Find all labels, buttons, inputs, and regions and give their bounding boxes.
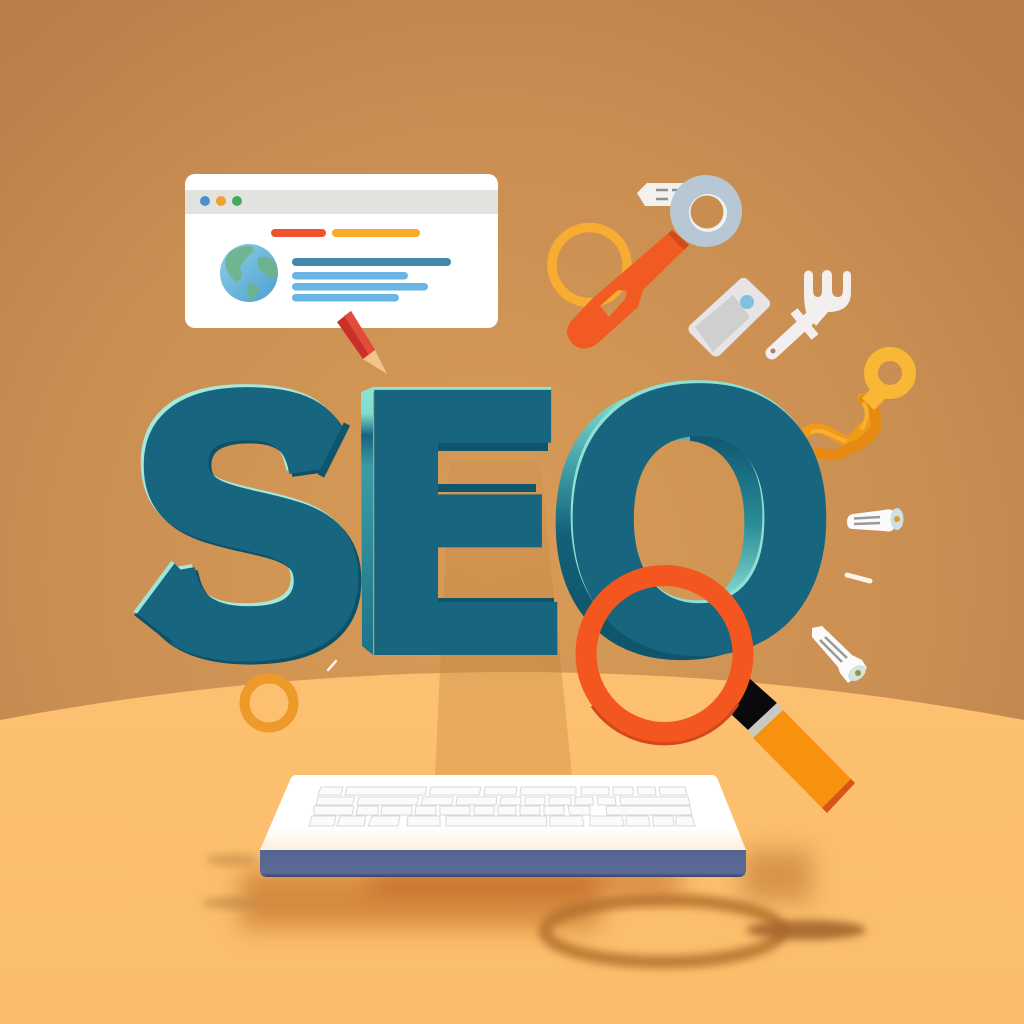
- small dash: [328, 661, 336, 670]
- floor shadows: [202, 850, 866, 962]
- letter O: O: [562, 310, 834, 723]
- letter O: O: [546, 317, 819, 730]
- globe icon: [220, 244, 278, 302]
- icon: card: [688, 278, 770, 357]
- letter O: [556, 380, 826, 660]
- title bar: [185, 190, 498, 214]
- icon: SEO 3D letters: [134, 380, 826, 665]
- icon: wrench: [552, 175, 742, 348]
- browser window: [185, 174, 498, 328]
- letter S: S: [130, 320, 364, 727]
- window panel: [185, 174, 498, 328]
- window dots: [200, 196, 242, 206]
- heading bars: [271, 229, 420, 237]
- text lines: [292, 258, 451, 302]
- lens ring: [586, 576, 743, 732]
- keyboard top: [260, 775, 746, 850]
- icon: plug top: [847, 508, 904, 532]
- icon: pencil: [337, 311, 387, 374]
- light beam behind keyboard: [435, 460, 572, 775]
- wrench handle: [567, 230, 689, 348]
- icon: magnifying glass: [586, 576, 855, 813]
- icon: keyboard: [260, 775, 746, 877]
- letter O: O: [544, 317, 816, 730]
- icon: small orange ring: [244, 678, 294, 728]
- letter E: E: [359, 316, 564, 727]
- yellow ring: [552, 228, 627, 302]
- floor: [0, 672, 1024, 1024]
- letter S: S: [127, 317, 361, 724]
- icon: fork tool: [770, 270, 851, 354]
- wrench head: [670, 175, 742, 247]
- handle: [732, 678, 777, 730]
- icon: chain with ring: [806, 354, 909, 455]
- keys: [309, 787, 695, 826]
- icon: plug bottom: [812, 626, 869, 684]
- letter O: O: [564, 313, 836, 726]
- dash: [847, 575, 870, 581]
- tag behind wrench: [637, 183, 684, 206]
- letter S: S: [133, 323, 367, 730]
- keyboard front: [260, 850, 746, 877]
- lens rim shade: [592, 704, 738, 744]
